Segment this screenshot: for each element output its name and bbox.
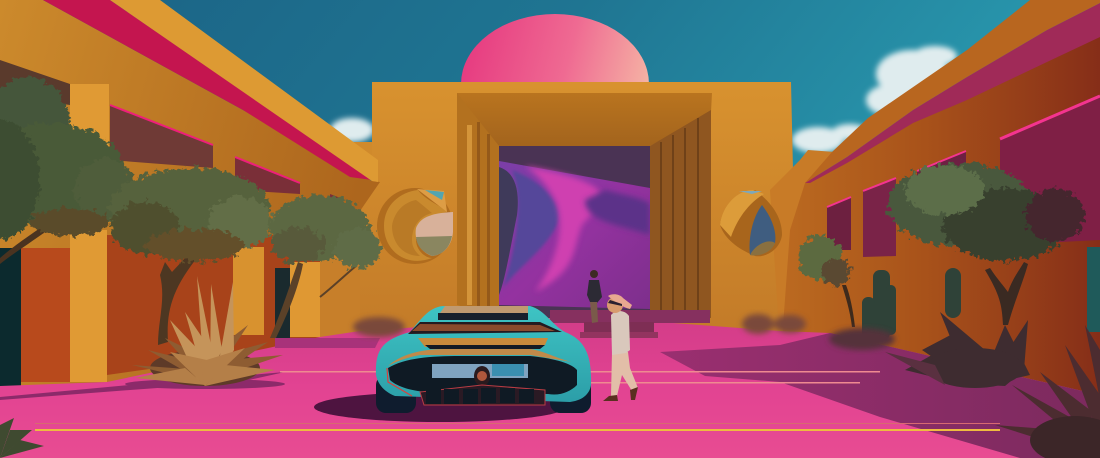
clouds xyxy=(330,46,957,153)
dark underlay xyxy=(150,350,260,386)
third pillar xyxy=(290,262,320,337)
left upper pillar xyxy=(70,84,109,154)
rear louvers xyxy=(408,313,562,349)
back wing behind left roof xyxy=(345,142,372,160)
right teal door xyxy=(1087,247,1100,332)
person: walking figure xyxy=(603,294,638,401)
trunk xyxy=(0,220,56,264)
cactus: back right xyxy=(862,268,961,340)
screen dark cloud xyxy=(585,190,650,235)
body xyxy=(376,306,591,402)
tail recess xyxy=(388,356,577,395)
agave: right dark xyxy=(885,312,1030,388)
central gate building xyxy=(300,82,835,345)
ground shadows and markings xyxy=(0,333,1100,458)
sky xyxy=(0,0,1100,340)
right wing wedge xyxy=(770,150,835,345)
right pleated wall xyxy=(650,110,711,318)
left roof pink underside xyxy=(43,0,372,180)
head xyxy=(590,270,598,278)
screen dark rock xyxy=(499,167,518,295)
screen pink stream xyxy=(525,166,601,292)
trunk xyxy=(985,262,1028,325)
purple screen xyxy=(499,161,650,309)
right wall xyxy=(782,35,1100,400)
shoes xyxy=(603,387,638,401)
tree: right small xyxy=(798,236,855,327)
lower blades xyxy=(135,348,275,386)
diffuser xyxy=(420,385,545,405)
agave: left large xyxy=(125,276,285,389)
ground xyxy=(0,316,1100,458)
legs xyxy=(590,302,598,323)
small agaves behind xyxy=(353,314,806,337)
screen blue rock xyxy=(503,170,559,288)
road markings xyxy=(35,429,1000,431)
tree: left right xyxy=(270,195,382,338)
foliage xyxy=(270,195,382,268)
back blades xyxy=(132,325,283,380)
front blades xyxy=(170,276,234,382)
shirt xyxy=(611,311,630,355)
left wing building xyxy=(0,0,380,395)
trunk xyxy=(270,262,303,338)
tail bar xyxy=(388,349,572,366)
right roof pink underside xyxy=(805,3,1100,183)
tree: right large xyxy=(888,163,1085,325)
end wall xyxy=(320,240,360,338)
agave: bottom left xyxy=(0,418,44,458)
wheels xyxy=(376,375,416,413)
pillar lit face xyxy=(70,230,107,382)
dark doorway xyxy=(275,268,290,338)
left wall xyxy=(0,0,380,395)
foliage xyxy=(0,77,135,240)
foliage xyxy=(110,168,272,261)
right wing building xyxy=(782,0,1100,400)
agave: right back xyxy=(829,328,895,350)
legs xyxy=(611,352,638,396)
agave: bottom right xyxy=(995,325,1100,458)
centre panel xyxy=(432,364,528,378)
right almond window xyxy=(720,190,782,256)
badge xyxy=(474,366,490,386)
right shadow xyxy=(660,333,1100,458)
car shadow xyxy=(314,392,566,422)
right windows xyxy=(827,95,1100,257)
left pleated wall xyxy=(457,93,499,318)
tree: far left xyxy=(0,77,135,264)
left shadow xyxy=(0,372,285,400)
person: far figure xyxy=(587,270,602,323)
gate front wall xyxy=(300,82,800,345)
opening ceiling xyxy=(457,93,712,146)
trunk xyxy=(158,242,208,345)
coat xyxy=(587,280,602,303)
car xyxy=(314,306,591,422)
dome xyxy=(461,14,649,154)
second pillar xyxy=(233,247,264,335)
steps xyxy=(550,310,710,338)
left roof fascia xyxy=(110,0,378,182)
hat xyxy=(608,294,632,309)
branch xyxy=(320,266,356,297)
right roof fascia xyxy=(805,0,1100,183)
foliage xyxy=(798,236,850,286)
tail light trim xyxy=(387,368,412,396)
roof panel xyxy=(440,306,528,315)
trunk xyxy=(842,285,855,327)
black doorway xyxy=(0,248,21,386)
foliage xyxy=(888,163,1085,261)
pillar dark side xyxy=(21,248,70,382)
back wall shade xyxy=(499,146,650,318)
head xyxy=(607,297,623,313)
left recessed lower wall xyxy=(107,235,320,375)
tree: left middle xyxy=(110,168,272,345)
left round window xyxy=(377,188,453,264)
left upper windows xyxy=(0,60,343,205)
